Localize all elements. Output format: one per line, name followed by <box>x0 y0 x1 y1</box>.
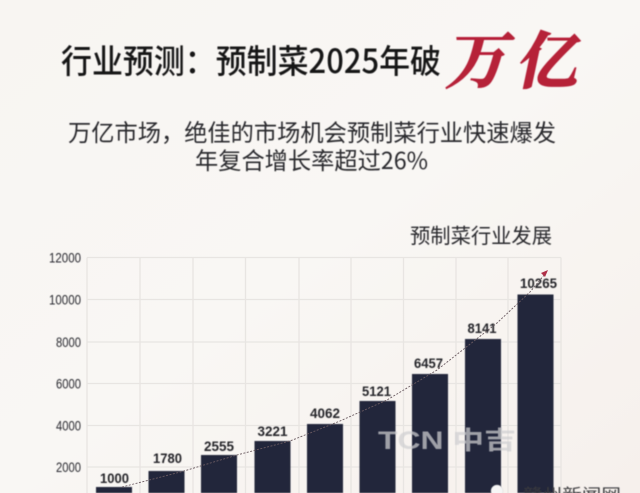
y axis labels: 10000 <box>49 292 81 308</box>
y axis labels: 6000 <box>56 376 81 392</box>
y axis labels <box>49 250 81 475</box>
y axis labels: 12000 <box>49 250 81 266</box>
value labels: 1780 <box>153 450 182 466</box>
bars <box>96 294 554 493</box>
y axis labels: 2000 <box>56 460 81 475</box>
value labels: 8141 <box>468 320 497 336</box>
value labels: 2555 <box>204 438 234 454</box>
value labels <box>100 275 557 486</box>
value labels: 6457 <box>414 355 443 371</box>
y axis labels: 4000 <box>56 418 81 434</box>
subtitle: 万亿市场，绝佳的市场机会预制菜行业快速爆发 <box>68 114 556 148</box>
watermark: TCN logo: TCN 中吉 <box>378 427 516 455</box>
title <box>61 12 592 101</box>
value labels: 1000 <box>100 470 129 486</box>
trend line arrow <box>122 270 548 487</box>
value labels: 10265 <box>520 275 557 291</box>
y axis labels: 8000 <box>56 335 81 350</box>
subtitle <box>68 114 556 176</box>
bar chart <box>49 250 561 493</box>
value labels: 4062 <box>310 405 340 421</box>
title emphasis: 万亿 brush lettering: 万亿 <box>441 12 592 101</box>
watermark: source account <box>491 481 621 493</box>
icon: chat bubble <box>491 485 503 493</box>
chart title: 预制菜行业发展 <box>410 219 552 249</box>
title: 行业预测：预制菜2025年破 <box>61 35 441 83</box>
subtitle: 年复合增长率超过26% <box>195 142 428 176</box>
value labels: 3221 <box>258 423 288 439</box>
value labels: 5121 <box>362 383 391 399</box>
